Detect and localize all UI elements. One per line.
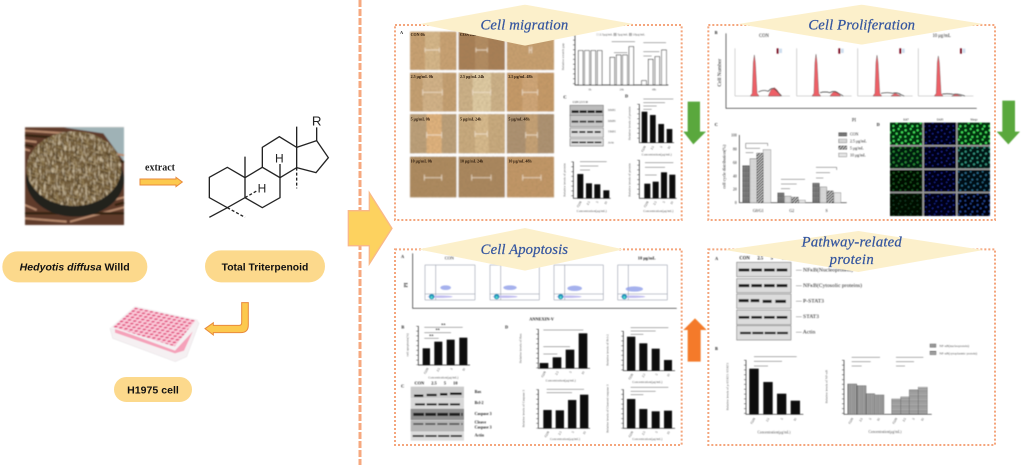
- flow cytometry scatter plots: PI: [404, 282, 409, 287]
- bar chart: cell apoptosis rate: cell apoptosis(%): [406, 333, 410, 357]
- western blot: MMPs: MMP2: [608, 109, 616, 112]
- heading: Cell Apoptosis: [418, 228, 623, 271]
- bar chart: cell cycle distribution: G0/G1: [753, 208, 764, 213]
- panel: cell migration: [395, 5, 706, 220]
- bar chart: Caspase 3: Relative levels of Caspase 3: [521, 390, 525, 427]
- micrograph labels: [400, 30, 533, 164]
- bar chart: cell apoptosis rate: CON: [423, 366, 430, 375]
- bar chart: MMP2: CON: [640, 144, 647, 153]
- bar chart: NF-kB levels: 2.5: [902, 417, 907, 422]
- bar chart: cell apoptosis rate: 2.5: [436, 367, 441, 372]
- bar chart: cell apoptosis rate: 5: [449, 367, 454, 370]
- pill: H1975 cell: H1975 cell: [127, 385, 179, 396]
- micrograph labels: 5 μg/mL 0h: [411, 117, 431, 122]
- micrograph labels: CON 48h: [508, 32, 525, 37]
- dashed divider: [358, 0, 362, 465]
- western blot: apoptosis proteins: 5: [444, 381, 446, 386]
- flow cytometry scatter plots: CON: [445, 255, 455, 260]
- bar chart: Caspase 3: Concentration(μg/mL): [550, 437, 580, 441]
- arrow: green down: [997, 101, 1020, 144]
- bar chart: Bax: 10: [581, 370, 586, 375]
- icon: 96-well plate: [110, 307, 199, 362]
- western blot: apoptosis proteins: [401, 381, 492, 441]
- flow cytometry histograms: CON: [759, 34, 770, 39]
- bar chart: cleaved caspase 3: 5: [654, 430, 659, 434]
- bar chart: MMP9: Concentration(μg/mL): [577, 209, 607, 213]
- bar chart: cell cycle distribution: 0: [735, 201, 737, 205]
- bar chart: p-STAT3/STAT3: Relative levels of p-STAT3 /STAT3: [726, 363, 730, 410]
- bar chart: TIMP2: [628, 160, 677, 213]
- chart: relative scratch gap: 48h: [652, 89, 657, 92]
- micrograph labels: 10 μg/mL 48h: [508, 159, 532, 164]
- micrograph labels: 2.5 μg/mL 48h: [508, 74, 533, 79]
- micrograph labels: 10 μg/mL 24h: [460, 159, 484, 164]
- bar chart: p-STAT3/STAT3: [715, 346, 803, 435]
- western blot: NF-kB and STAT3: — Actin: [795, 330, 815, 336]
- bar chart: cell apoptosis rate: B: [401, 325, 404, 330]
- bar chart: Bax: Concentration(μg/mL): [546, 378, 576, 382]
- flow cytometry histograms: Cell Number: [717, 59, 723, 87]
- western blot: apoptosis proteins: Cleave: [475, 420, 486, 425]
- bar chart: TIMP2: CON: [643, 200, 650, 208]
- micrograph labels: CON 0h: [411, 32, 426, 37]
- bar chart: cell cycle distribution: cell cycle distribution(%): [721, 144, 726, 189]
- bar chart: NF-kB levels: Concentration(μg/mL): [868, 430, 902, 434]
- flow cytometry histograms: 10 μg/mL: [932, 34, 951, 39]
- heading: Pathway-related protein: [725, 231, 983, 272]
- heading: Cell migration: [420, 5, 633, 46]
- flow cytometry histograms: B: [715, 30, 718, 35]
- chart: relative scratch gap: 24h: [620, 89, 624, 92]
- chemical structure: triterpenoid skeleton: H: [258, 182, 266, 196]
- bar chart: cleaved caspase 3: [605, 384, 675, 441]
- bar chart: Bcl-2: 10: [666, 372, 671, 377]
- panel: pathway-related protein: [708, 231, 995, 445]
- western blot: apoptosis proteins: C: [401, 383, 404, 388]
- immunofluorescence grid: DAPI: [937, 119, 943, 122]
- bar chart: Caspase 3: 5: [571, 430, 575, 434]
- chart: relative scratch gap: □ 2.5μg/mL ▨ 5μg/mL ▧ 10μg/mL: [597, 32, 645, 36]
- arrow: orange up: [683, 318, 707, 362]
- heading: Cell migration: Cell migration: [480, 17, 568, 33]
- western blot: apoptosis proteins: Actin: [475, 433, 485, 438]
- chemical structure: triterpenoid skeleton: [209, 114, 328, 217]
- bar chart: TIMP2: 5: [662, 200, 666, 204]
- bar chart: MMP9: [562, 162, 611, 213]
- micrograph labels: 2.5 μg/mL 24h: [460, 74, 485, 79]
- arrow: extract: [140, 162, 182, 187]
- bar chart: MMP9: 2.5: [586, 200, 591, 206]
- bar chart: Bcl-2: 5: [654, 372, 659, 376]
- chemical structure: triterpenoid skeleton: H: [275, 152, 284, 166]
- bar chart: TIMP2: Concentration(μg/mL): [643, 209, 673, 213]
- bar chart: p-STAT3/STAT3: 10: [793, 417, 798, 422]
- bar chart: p-STAT3/STAT3: Concentration(μg/mL): [757, 431, 791, 435]
- panel: cell proliferation: [708, 5, 1020, 220]
- bar chart: cell apoptosis rate: [401, 323, 470, 379]
- bar chart: p-STAT3/STAT3: B: [715, 346, 718, 351]
- western blot: apoptosis proteins: 2.5: [431, 381, 437, 386]
- arrow: extract: extract: [145, 162, 176, 173]
- flow cytometry scatter plots: A: [401, 254, 405, 259]
- bar chart: cleaved caspase 3: 10: [666, 430, 671, 435]
- immunofluorescence grid: D: [877, 122, 880, 127]
- bar chart: cell cycle distribution: 20: [733, 188, 737, 192]
- arrow: to cell plate: [205, 303, 248, 335]
- western blot: MMPs: C: [563, 94, 566, 99]
- bar chart: cell cycle distribution: 5 μg/mL: [850, 145, 864, 150]
- western blot: NF-kB and STAT3: 5: [771, 256, 774, 261]
- bar chart: MMP2: 10: [667, 145, 672, 150]
- bar chart: p-STAT3/STAT3: 2.5: [765, 417, 770, 422]
- bar chart: MMP9: 10: [603, 200, 608, 205]
- bar chart: MMP9: Relative levels of protein: [562, 163, 566, 197]
- western blot: apoptosis proteins: Caspase 3: [475, 411, 492, 416]
- flow cytometry scatter plots: ANNEXIN-V: [529, 317, 555, 322]
- western blot: MMPs: Actin: [608, 141, 615, 144]
- chart: relative scratch gap: 0h: [589, 89, 592, 92]
- immunofluorescence grid: [877, 119, 990, 216]
- heading: Cell Proliferation: [738, 5, 983, 45]
- bar chart: cell cycle distribution: 40: [733, 174, 737, 178]
- western blot: apoptosis proteins: 10: [453, 381, 457, 386]
- bar chart: MMP2: D: [625, 93, 628, 98]
- left panel: extraction workflow: [2, 114, 392, 402]
- western blot: apoptosis proteins: Caspase 3: [475, 425, 492, 430]
- bar chart: NF-kB levels: [824, 344, 977, 434]
- bar chart: cell cycle distribution: CON: [850, 132, 859, 137]
- micrograph labels: 10 μg/mL 0h: [411, 159, 433, 164]
- pill: Hedyotis diffusa Willd: Hedyotis diffusa Willd: [20, 262, 130, 273]
- big arrow to results: [348, 193, 392, 264]
- western blot: MMPs: CON 2.5 5 10: [573, 101, 589, 104]
- bar chart: Bcl-2: CON: [628, 372, 635, 380]
- bar chart: cell apoptosis rate: 10: [461, 367, 466, 372]
- flow cytometry scatter plots: 10 μg/mL: [638, 255, 656, 260]
- bar chart: MMP2: 5: [659, 145, 663, 148]
- bar chart: NF-kB levels: CON: [892, 416, 899, 425]
- bar chart: Bax: CON: [540, 370, 547, 378]
- bar chart: TIMP2: Relative levels of protein: [628, 163, 632, 197]
- micrograph labels: A: [400, 30, 404, 35]
- bar chart: cell cycle distribution: S: [826, 208, 828, 213]
- bar chart: cleaved caspase 3: Relative levels of Cleaved caspase 3: [605, 384, 609, 433]
- bar chart: cell cycle distribution: 80: [733, 147, 737, 151]
- western blot: NF-kB and STAT3: 10: [782, 256, 787, 261]
- bar chart: NF-kB levels: 2.5: [858, 417, 864, 422]
- pill: Total Triterpenoid: Total Triterpenoid: [222, 262, 308, 273]
- bar chart: TIMP2: 2.5: [652, 200, 658, 206]
- bar chart: cell apoptosis rate: **: [429, 333, 433, 338]
- bar chart: p-STAT3/STAT3: CON: [750, 416, 757, 425]
- photo: Hedyotis diffusa herb in bowl: [25, 127, 124, 225]
- flow cytometry histograms: PI: [852, 118, 857, 123]
- bar chart: Caspase 3: CON: [544, 430, 551, 438]
- western blot: NF-kB and STAT3: — STAT3: [795, 314, 819, 320]
- bar chart: cell cycle distribution: 10 μg/mL: [850, 153, 866, 158]
- western blot: NF-kB and STAT3: — P-STAT3: [795, 299, 824, 305]
- chemical structure: triterpenoid skeleton: R: [312, 114, 321, 129]
- bar chart: NF-kB levels: 5: [868, 417, 872, 420]
- immunofluorescence grid: Ki67: [903, 119, 909, 122]
- western blot: apoptosis proteins: Bax: [475, 389, 481, 394]
- bar chart: Caspase 3: [521, 389, 590, 441]
- bar chart: Bax: 2.5: [554, 370, 560, 376]
- bar chart: MMP2: 2.5: [650, 145, 655, 150]
- bar chart: NF-kB levels: 10: [876, 417, 881, 422]
- bar chart: NF-kB levels: NF-κB(cytoplasmic protein): [939, 351, 977, 355]
- bar chart: Bax: 5: [568, 370, 573, 374]
- bar chart: cell cycle distribution: 100: [731, 134, 737, 138]
- heading: Pathway-related protein: Pathway-related: [801, 235, 902, 251]
- western blot: NF-kB and STAT3: A: [715, 256, 719, 261]
- bar chart: cell apoptosis rate: **: [436, 328, 440, 333]
- bar chart: Caspase 3: 10: [582, 430, 587, 435]
- western blot: NF-kB and STAT3: — NFκB(Nucleoprotein): [795, 266, 853, 273]
- immunofluorescence grid: Merge: [971, 119, 978, 122]
- bar chart: cell apoptosis rate: Concentration(μg/mL): [428, 375, 458, 379]
- flow cytometry scatter plots: [401, 253, 677, 322]
- bar chart: Bcl-2: Concentration(μg/mL): [632, 380, 662, 384]
- western blot: NF-kB and STAT3: [715, 256, 862, 340]
- western blot: apoptosis proteins: CON: [415, 381, 425, 386]
- panel: cell apoptosis: [395, 228, 707, 445]
- micrograph labels: 5 μg/mL 24h: [460, 117, 482, 122]
- bar chart: Bcl-2: 2.5: [641, 372, 646, 378]
- chart: relative scratch gap: Relative scratch gap: [561, 43, 565, 70]
- chart: relative scratch gap: [561, 32, 668, 92]
- micrograph labels: CON 24h: [460, 32, 477, 37]
- arrow: green down: [683, 102, 706, 144]
- heading: Pathway-related protein: protein: [829, 252, 874, 268]
- bar chart: cleaved caspase 3: 2.5: [641, 430, 646, 436]
- bar chart: cell cycle distribution: C: [715, 122, 718, 127]
- bar chart: cell cycle distribution: G2: [789, 208, 794, 213]
- bar chart: TIMP2: 10: [669, 200, 674, 205]
- western blot: NF-kB and STAT3: — NFκB(Cytosolic proteins): [795, 282, 862, 289]
- bar chart: cleaved caspase 3: CON: [628, 430, 635, 438]
- western blot: NF-kB and STAT3: 2.5: [757, 256, 764, 261]
- bar chart: p-STAT3/STAT3: 5: [780, 417, 784, 420]
- bar chart: cell cycle distribution: 2.5 μg/mL: [850, 139, 867, 144]
- micrograph labels: 2.5 μg/mL 0h: [411, 74, 434, 79]
- bar chart: NF-kB levels: NF-κB(nucleoprotein): [939, 344, 969, 348]
- pill: Hedyotis diffusa Willd: [2, 251, 147, 282]
- bar chart: Caspase 3: 2.5: [557, 430, 563, 436]
- western blot: apoptosis proteins: Bcl-2: [475, 400, 484, 405]
- heading: Cell Proliferation: Cell Proliferation: [808, 17, 915, 33]
- bar chart: MMP2: Relative levels of protein: [628, 106, 632, 140]
- western blot: MMPs: [563, 94, 616, 146]
- bar chart: MMP2: [625, 93, 674, 157]
- western blot: MMPs: TIMP2: [608, 131, 616, 134]
- bar chart: Bcl-2: [605, 328, 675, 384]
- micrograph labels: 5 μg/mL 48h: [508, 117, 530, 122]
- pill: Total Triterpenoid: [205, 250, 325, 282]
- bar chart: cell cycle distribution: [715, 122, 867, 213]
- micrographs: scratch wound grid: [407, 30, 557, 200]
- bar chart: NF-kB levels: CON: [848, 416, 855, 425]
- bar chart: NF-kB levels: Relative levels of NF-κB: [824, 369, 828, 403]
- bar chart: MMP2: Concentration(μg/mL): [642, 153, 672, 157]
- bar chart: NF-kB levels: 5: [911, 417, 916, 420]
- bar chart: Bcl-2: Relative levels of Bcl-2: [605, 334, 609, 366]
- bar chart: NF-kB levels: 10: [920, 417, 925, 422]
- bar chart: MMP9: CON: [576, 200, 583, 208]
- bar chart: Bax: [505, 325, 590, 382]
- bar chart: Bax: D: [505, 325, 508, 330]
- flow cytometry histograms: [715, 30, 977, 123]
- bar chart: MMP9: 5: [595, 200, 599, 204]
- bar chart: cleaved caspase 3: Concentration(μg/mL): [632, 437, 662, 441]
- western blot: NF-kB and STAT3: CON: [739, 256, 750, 261]
- western blot: MMPs: MMP9: [608, 120, 616, 123]
- bar chart: cell apoptosis rate: **: [441, 323, 445, 328]
- bar chart: cell cycle distribution: 60: [733, 161, 737, 165]
- pill: H1975 cell: [114, 377, 192, 402]
- bar chart: Bax: Relative levels of Bax: [519, 333, 523, 363]
- heading: Cell Apoptosis: Cell Apoptosis: [481, 242, 568, 258]
